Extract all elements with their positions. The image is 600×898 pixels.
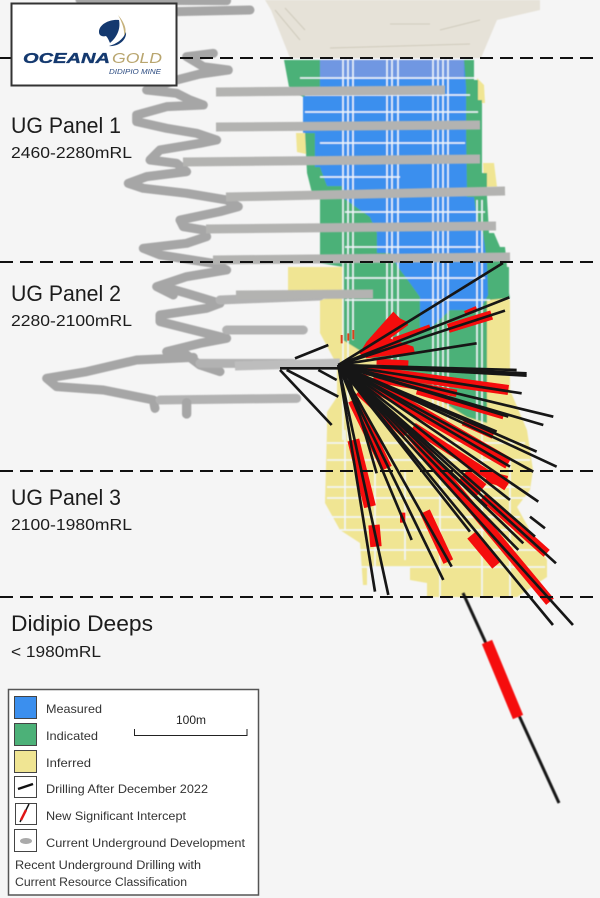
swatch: intercept — [16, 804, 36, 824]
inferred zone — [288, 78, 547, 597]
logo box — [12, 4, 176, 86]
white block grid — [300, 60, 545, 597]
logo wordmark gold: GOLD — [112, 51, 162, 67]
logo subtitle: DIDIPIO MINE — [109, 69, 161, 76]
surface pit — [265, 0, 540, 58]
icon: oceanagold globe and swoosh — [99, 15, 126, 46]
swatch: development — [14, 830, 36, 852]
upper decline ramp — [80, 0, 250, 295]
Didipio Deeps drill hole — [463, 593, 559, 803]
range: Didipio Deeps: < 1980mRL — [11, 644, 101, 661]
logo wordmark: OCEANA — [23, 51, 110, 67]
periwinkle top band — [320, 60, 464, 79]
horizontal drifts — [183, 90, 510, 295]
legend caption: Current Resource Classification — [15, 877, 187, 889]
underground development tunnels — [47, 0, 510, 414]
scale bar — [134, 713, 247, 736]
swatch: indicated — [14, 724, 36, 746]
heading: Didipio Deeps: Didipio Deeps — [11, 611, 153, 636]
label: inferred: Inferred — [46, 756, 91, 770]
scale label: 100m — [176, 713, 206, 727]
legend caption: Recent Underground Drilling with — [15, 860, 201, 872]
heading: UG Panel 2: UG Panel 2 — [11, 281, 121, 306]
swatch: inferred — [14, 750, 36, 772]
label: measured: Measured — [46, 702, 102, 716]
range: UG Panel 2: 2280-2100mRL — [11, 313, 132, 330]
label: development: Current Underground Development — [46, 836, 246, 850]
measured zone — [303, 60, 488, 327]
indicated zone — [284, 60, 510, 423]
resource block model — [284, 60, 547, 597]
label: intercept: New Significant Intercept — [46, 809, 187, 823]
label: indicated: Indicated — [46, 729, 98, 743]
label: drilling: Drilling After December 2022 — [46, 782, 208, 796]
drilling lines — [280, 263, 573, 625]
panel boundary dashed lines — [0, 58, 600, 597]
lower decline ramp — [47, 287, 320, 414]
intercepts under drilling — [342, 308, 550, 602]
swatch: drilling — [14, 776, 36, 798]
heading: UG Panel 1: UG Panel 1 — [11, 113, 121, 138]
range: UG Panel 3: 2100-1980mRL — [11, 517, 132, 534]
heading: UG Panel 3: UG Panel 3 — [11, 485, 121, 510]
range: UG Panel 1: 2460-2280mRL — [11, 145, 132, 162]
legend panel — [8, 690, 258, 895]
swatch: measured — [14, 696, 36, 718]
drill holes and intercepts — [280, 263, 573, 625]
